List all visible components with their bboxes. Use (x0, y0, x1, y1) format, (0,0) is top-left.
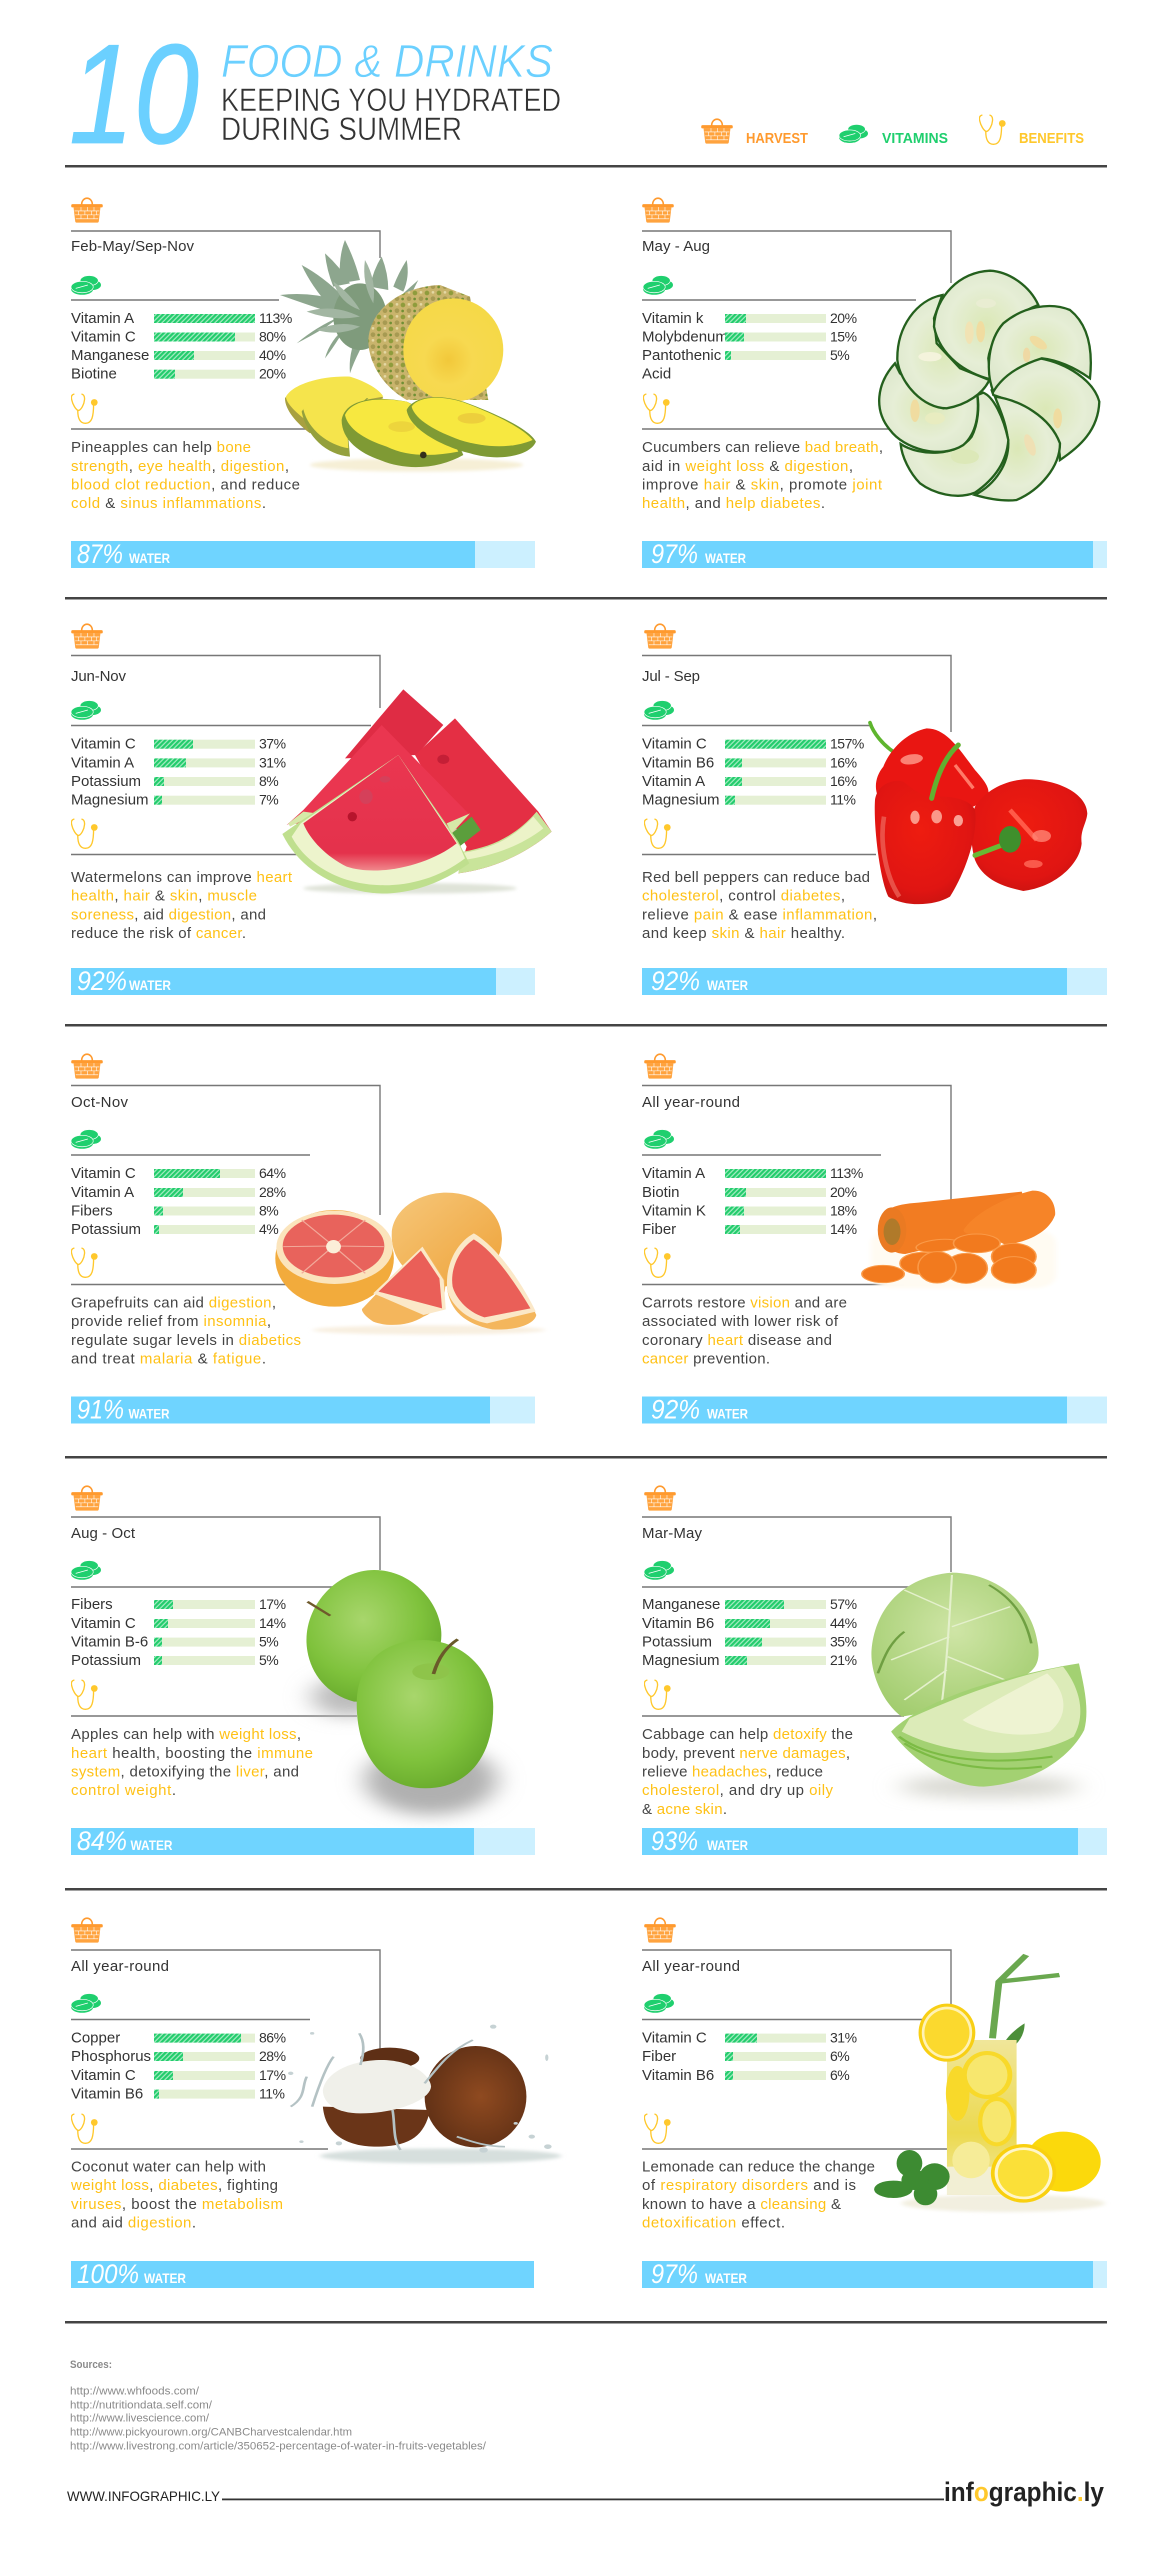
benefits text: associated with lower risk of (642, 1313, 839, 1330)
benefits text: Apples can help with weight loss, (71, 1726, 301, 1743)
benefits text: relieve headaches, reduce (642, 1764, 823, 1781)
water bar: WATER (129, 550, 170, 566)
benefits text: provide relief from insomnia, (71, 1313, 271, 1330)
big number 10: 10 (69, 15, 199, 174)
benefits text: health, hair & skin, muscle (71, 888, 257, 905)
water bar: 100% (77, 2259, 139, 2289)
vitamin chart: Vitamin A (71, 754, 134, 771)
benefits text: aid in weight loss & digestion, (642, 458, 853, 475)
vitamin chart: 14% (830, 1221, 857, 1237)
vitamin chart (71, 736, 286, 809)
vitamin chart: Potassium (642, 1634, 712, 1651)
benefits text: strength, eye health, digestion, (71, 458, 289, 475)
source links: http://www.whfoods.com/ (70, 2386, 200, 2398)
vitamin chart: 15% (830, 328, 857, 344)
water bar (642, 1394, 1107, 1424)
water bar: WATER (707, 1837, 748, 1853)
vitamin chart (642, 1596, 857, 1669)
vitamin chart: Magnesium (71, 792, 149, 809)
vitamin chart: Biotine (71, 366, 117, 383)
icon: basket (71, 624, 103, 649)
vitamin chart: Magnesium (642, 792, 720, 809)
icon: basket (642, 198, 674, 223)
icon: basket (644, 624, 676, 649)
source links: http://www.livescience.com/ (70, 2413, 210, 2425)
icon: pills (644, 1994, 674, 2013)
icon: stethoscope (643, 394, 670, 423)
subtitle line 1: KEEPING YOU HYDRATED (221, 82, 561, 118)
harvest months: All year-round (71, 1958, 169, 1975)
water bar (71, 539, 535, 569)
vitamin chart: 44% (830, 1615, 857, 1631)
benefits text: cholesterol, control diabetes, (642, 888, 845, 905)
icon: stethoscope (644, 1248, 671, 1277)
vitamin chart: Fibers (71, 1202, 113, 1220)
vitamin chart: 14% (259, 1615, 286, 1631)
icon: pills (71, 1561, 101, 1580)
vitamin chart: 31% (830, 2030, 857, 2046)
image: red bell peppers (870, 723, 1087, 904)
vitamin chart (642, 736, 864, 809)
icon: pills (644, 701, 674, 720)
water bar: WATER (130, 1837, 172, 1853)
vitamin chart: Phosphorus (71, 2048, 151, 2065)
icon: pills (643, 276, 673, 295)
benefits text (71, 439, 300, 512)
headline food and drinks: FOOD & DRINKS (221, 35, 553, 87)
panel: pineapple (71, 198, 536, 569)
image: watermelon (282, 689, 552, 894)
icon: stethoscope (71, 1248, 98, 1277)
panel: carrot (642, 1054, 1107, 1424)
vitamin chart: 16% (830, 773, 857, 789)
benefits text: Watermelons can improve heart (71, 869, 293, 886)
harvest months: All year-round (642, 1958, 740, 1975)
vitamin chart: 31% (259, 754, 286, 770)
vitamin chart: Vitamin C (71, 328, 136, 346)
title (69, 15, 561, 174)
source links: http://www.pickyourown.org/CANBCharvestcalendar.htm (70, 2427, 352, 2439)
harvest months: Mar-May (642, 1525, 702, 1542)
icon: vitamins pills (839, 124, 868, 143)
panel: red bell peppers (642, 624, 1107, 996)
vitamin chart: 5% (830, 347, 849, 363)
vitamin chart (71, 310, 292, 383)
icon: stethoscope (71, 819, 98, 848)
water bar (642, 539, 1107, 569)
vitamin chart: 80% (259, 328, 286, 344)
benefits text: viruses, boost the metabolism (71, 2196, 283, 2213)
vitamin chart: 4% (259, 1221, 278, 1237)
icon: stethoscope (71, 1680, 98, 1709)
vitamin chart: 11% (259, 2086, 285, 2102)
water bar: WATER (707, 977, 748, 993)
water bar (71, 2259, 534, 2289)
water bar: WATER (705, 550, 746, 566)
subtitle line 2: DURING SUMMER (221, 111, 462, 147)
image: carrots (862, 1191, 1056, 1288)
icon: stethoscope (644, 1680, 671, 1709)
water bar: WATER (129, 977, 171, 993)
legend label vitamins: VITAMINS (882, 130, 948, 147)
vitamin chart: 20% (259, 366, 286, 382)
benefits text: cancer prevention. (642, 1351, 770, 1368)
benefits text: relieve pain & ease inflammation, (642, 906, 877, 923)
benefits text (642, 2158, 875, 2232)
water bar: 87% (77, 539, 123, 569)
icon: basket (71, 1054, 103, 1079)
vitamin chart: Vitamin B6 (642, 2067, 714, 2084)
vitamin chart: 35% (830, 1634, 857, 1650)
benefits text: detoxification effect. (642, 2214, 785, 2232)
benefits text: & acne skin. (642, 1801, 727, 1818)
vitamin chart: Fibers (71, 1596, 113, 1613)
benefits text (71, 1726, 313, 1799)
vitamin chart (71, 2030, 286, 2103)
legend (701, 115, 1084, 147)
vitamin chart: Vitamin K (642, 1202, 706, 1220)
icon: pills (71, 1994, 101, 2013)
vitamin chart: 18% (830, 1202, 857, 1218)
water bar: 97% (651, 539, 698, 569)
sources (70, 2359, 487, 2452)
panel: lemonade (642, 1918, 1107, 2289)
benefits text: improve hair & skin, promote joint (642, 477, 883, 494)
benefits text: system, detoxifying the liver, and (71, 1764, 299, 1781)
benefits text: coronary heart disease and (642, 1332, 832, 1349)
benefits text (71, 1295, 301, 1368)
vitamin chart: Potassium (71, 773, 141, 790)
panel: cucumber (642, 198, 1107, 569)
vitamin chart: 5% (259, 1652, 278, 1668)
harvest months: Feb-May/Sep-Nov (71, 238, 194, 255)
benefits text: and keep skin & hair healthy. (642, 925, 845, 942)
vitamin chart: 20% (830, 1184, 857, 1200)
water bar: WATER (128, 1406, 170, 1422)
vitamin chart: 21% (830, 1652, 857, 1668)
vitamin chart: 157% (830, 736, 864, 752)
water bar: 97% (651, 2259, 698, 2289)
vitamin chart: 6% (830, 2067, 849, 2083)
icon: basket (71, 198, 103, 223)
vitamin chart (71, 1596, 286, 1669)
icon: pills (71, 1130, 101, 1149)
water bar: 93% (651, 1826, 698, 1856)
water bar: 84% (77, 1826, 127, 1856)
water bar (642, 966, 1107, 996)
image: grapefruit (275, 1193, 545, 1335)
water bar (71, 1394, 535, 1424)
icon: stethoscope (644, 2114, 671, 2143)
benefits text: regulate sugar levels in diabetics (71, 1332, 301, 1349)
harvest months: May - Aug (642, 238, 710, 255)
image: cabbage (871, 1573, 1086, 1797)
vitamin chart: 6% (830, 2048, 849, 2064)
vitamin chart: Potassium (71, 1221, 141, 1238)
benefits text: Pineapples can help bone (71, 439, 251, 456)
benefits text: soreness, aid digestion, and (71, 906, 266, 923)
harvest months: All year-round (642, 1094, 740, 1111)
panel: apple (71, 1486, 535, 1856)
vitamin chart: 20% (830, 310, 857, 326)
water bar (71, 1826, 535, 1856)
benefits text: and treat malaria & fatigue. (71, 1351, 266, 1368)
image: pineapple (280, 240, 536, 472)
vitamin chart: Fiber (642, 2048, 676, 2065)
benefits text: body, prevent nerve damages, (642, 1745, 850, 1762)
vitamin chart: Vitamin A (71, 310, 134, 327)
vitamin chart: Vitamin k (642, 310, 704, 327)
benefits text: Cabbage can help detoxify the (642, 1726, 853, 1743)
benefits text: Cucumbers can relieve bad breath, (642, 439, 883, 456)
benefits text: health, and help diabetes. (642, 495, 825, 512)
benefits text: weight loss, diabetes, fighting (70, 2177, 278, 2194)
icon: benefits stethoscope (979, 115, 1006, 144)
benefits text: Carrots restore vision and are (642, 1295, 847, 1312)
benefits text: Coconut water can help with (71, 2158, 266, 2176)
benefits text: known to have a cleansing & (642, 2196, 841, 2213)
water bar: 92% (77, 966, 127, 996)
vitamin chart: 17% (259, 1596, 286, 1612)
vitamin chart: Vitamin C (71, 1615, 136, 1632)
vitamin chart: Copper (71, 2030, 120, 2047)
harvest months: Aug - Oct (71, 1525, 136, 1542)
vitamin chart: 5% (259, 1634, 278, 1650)
benefits text: of respiratory disorders and is (642, 2177, 856, 2194)
legend label harvest: HARVEST (746, 130, 808, 147)
footer (67, 2477, 1104, 2507)
water bar: 92% (651, 1394, 700, 1424)
benefits text: cold & sinus inflammations. (71, 495, 266, 512)
icon: pills (644, 1561, 674, 1580)
vitamin chart: 17% (259, 2067, 286, 2083)
icon: basket (71, 1918, 103, 1943)
water bar (642, 2259, 1107, 2289)
vitamin chart: Biotin (642, 1184, 680, 1201)
benefits text: Grapefruits can aid digestion, (71, 1295, 276, 1312)
vitamin chart: 57% (830, 1596, 857, 1612)
icon: stethoscope (71, 2114, 98, 2143)
icon: stethoscope (644, 819, 671, 848)
source links: http://nutritiondata.self.com/ (70, 2399, 213, 2411)
vitamin chart: Vitamin B6 (642, 1615, 714, 1632)
image: cucumber slices (879, 271, 1099, 500)
logo: infographic.ly (944, 2477, 1104, 2507)
sources heading: Sources: (70, 2359, 112, 2371)
vitamin chart (642, 1165, 863, 1238)
vitamin chart (642, 310, 857, 383)
vitamin chart: 86% (259, 2030, 286, 2046)
water bar: 92% (651, 966, 700, 996)
footer website: WWW.INFOGRAPHIC.LY (67, 2488, 221, 2504)
benefits text (70, 2158, 283, 2232)
benefits text (642, 1726, 853, 1818)
vitamin chart: Vitamin C (71, 1165, 136, 1182)
benefits text: heart health, boosting the immune (71, 1745, 313, 1762)
vitamin chart: Vitamin C (642, 736, 707, 753)
vitamin chart: Manganese (642, 1596, 720, 1613)
vitamin chart: 113% (259, 310, 292, 326)
vitamin chart: Manganese (71, 347, 149, 364)
water bar: 91% (77, 1394, 124, 1424)
icon: harvest basket (701, 119, 733, 144)
benefits text: cholesterol, and dry up oily (642, 1782, 834, 1799)
benefits text: control weight. (71, 1782, 176, 1799)
icon: stethoscope (71, 394, 98, 423)
vitamin chart: 113% (830, 1165, 863, 1181)
vitamin chart: Molybdenum (642, 328, 728, 346)
harvest months: Jul - Sep (642, 668, 700, 685)
icon: basket (644, 1054, 676, 1079)
vitamin chart: 8% (259, 773, 278, 789)
vitamin chart: Fiber (642, 1221, 676, 1238)
vitamin chart: Vitamin A (71, 1184, 134, 1201)
image: coconut with splash (288, 2025, 561, 2163)
vitamin chart: Vitamin C (642, 2030, 707, 2047)
vitamin chart: 64% (259, 1165, 286, 1181)
image: lemonade glass with lemons (874, 1955, 1105, 2212)
harvest months: Jun-Nov (71, 668, 126, 685)
vitamin chart: 28% (259, 1184, 286, 1200)
vitamin chart: 16% (830, 754, 857, 770)
vitamin chart: Vitamin C (71, 2067, 136, 2084)
benefits text (642, 1295, 847, 1368)
icon: pills (71, 276, 101, 295)
icon: basket (71, 1486, 103, 1511)
vitamin chart (71, 1165, 286, 1238)
benefits text: Red bell peppers can reduce bad (642, 869, 870, 886)
benefits text: blood clot reduction, and reduce (71, 477, 300, 494)
panel: grapefruit (71, 1054, 545, 1424)
source links: http://www.livestrong.com/article/350652-percentage-of-water-in-fruits-vegetables/ (70, 2440, 487, 2452)
vitamin chart: 11% (830, 792, 856, 808)
benefits text: Lemonade can reduce the change (642, 2158, 875, 2176)
vitamin chart: Vitamin B-6 (71, 1634, 148, 1651)
vitamin chart: Vitamin C (71, 736, 136, 753)
image: green apples (306, 1570, 497, 1815)
benefits text (71, 869, 293, 942)
benefits text: and aid digestion. (71, 2214, 196, 2232)
vitamin chart: 37% (259, 736, 286, 752)
vitamin chart: Magnesium (642, 1652, 720, 1669)
vitamin chart: 40% (259, 347, 286, 363)
benefits text (642, 869, 877, 942)
icon: pills (644, 1130, 674, 1149)
vitamin chart: 8% (259, 1202, 278, 1218)
icon: basket (644, 1918, 676, 1943)
source links (70, 2386, 487, 2452)
vitamin chart: Vitamin A (642, 1165, 705, 1182)
water bar (71, 966, 535, 996)
water bar: WATER (144, 2270, 186, 2286)
icon: basket (644, 1486, 676, 1511)
vitamin chart: Vitamin A (642, 773, 705, 790)
icon: pills (71, 701, 101, 720)
panel: watermelon (71, 624, 552, 996)
water bar: WATER (705, 2270, 747, 2286)
vitamin chart: Vitamin B6 (642, 754, 714, 771)
water bar (642, 1826, 1107, 1856)
harvest months: Oct-Nov (71, 1094, 128, 1111)
vitamin chart: Acid (642, 366, 671, 383)
vitamin chart: Potassium (71, 1652, 141, 1669)
legend label benefits: BENEFITS (1019, 130, 1084, 147)
vitamin chart: 7% (259, 792, 278, 808)
water bar: WATER (707, 1406, 748, 1422)
panel: cabbage (642, 1486, 1107, 1856)
benefits text: reduce the risk of cancer. (71, 925, 246, 942)
vitamin chart: Pantothenic (642, 347, 722, 364)
benefits text (642, 439, 883, 512)
vitamin chart (642, 2030, 857, 2084)
vitamin chart: Vitamin B6 (71, 2086, 143, 2103)
panel: coconut water (70, 1918, 561, 2289)
vitamin chart: 28% (259, 2048, 286, 2064)
